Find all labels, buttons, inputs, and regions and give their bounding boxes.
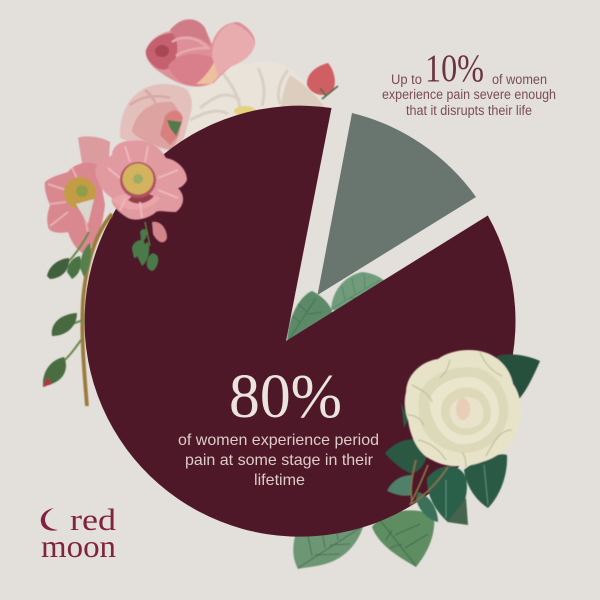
text: 10% callout: of women [492, 72, 547, 87]
flowers behind the pie [120, 62, 328, 152]
text: 10% callout: Up to [391, 72, 422, 87]
icon: dark leaves [385, 354, 540, 525]
icon: leaf bud 5 [43, 357, 66, 387]
icon: lower middle light leaf [372, 510, 434, 567]
text: 80% callout: pain at some stage in their [185, 452, 374, 469]
logo: red moon [41, 502, 117, 564]
icon: leaf in slice gap right [331, 272, 386, 312]
text: 80% callout: of women experience period [178, 432, 379, 449]
icon: leaf bud 2 [67, 256, 81, 279]
text: 10% figure: 10% [425, 47, 484, 90]
text: 10% callout: experience pain severe enough [382, 87, 556, 102]
text: 10% callout [382, 47, 556, 118]
text: 80% callout [178, 363, 379, 489]
icon: leaf bud 1 [47, 258, 69, 279]
leaves behind the pie [287, 272, 434, 569]
stem with buds and leaves [43, 214, 167, 406]
text: 10% callout: that it disrupts their life [406, 103, 532, 118]
icon: pink mid rose [120, 84, 192, 152]
chart: 80% slice [84, 106, 515, 537]
logo: red moon: red [70, 502, 117, 537]
white rose with leaves [385, 350, 540, 525]
icon: leaf bud 4 [52, 313, 77, 336]
icon: white rose [405, 350, 521, 467]
icon: right red bud [307, 63, 338, 99]
logo: red moon: moon [41, 528, 116, 564]
icon: crescent moon [41, 508, 58, 531]
icon: leaf in slice gap left [287, 291, 333, 342]
text: 80% callout: 80% [229, 363, 342, 431]
icon: top pink rose [146, 19, 255, 87]
icon: lower left light leaf [293, 515, 366, 569]
icon: white peony [180, 62, 328, 145]
text: 80% callout: lifetime [254, 472, 305, 489]
icon: left pink flower [45, 136, 110, 254]
chart: 10% slice [318, 113, 476, 295]
icon: hanging leaves [132, 222, 167, 271]
icon: front pink flower [95, 140, 187, 220]
flower cluster top left [45, 19, 338, 254]
icon: leaf bud 3 [80, 243, 91, 277]
